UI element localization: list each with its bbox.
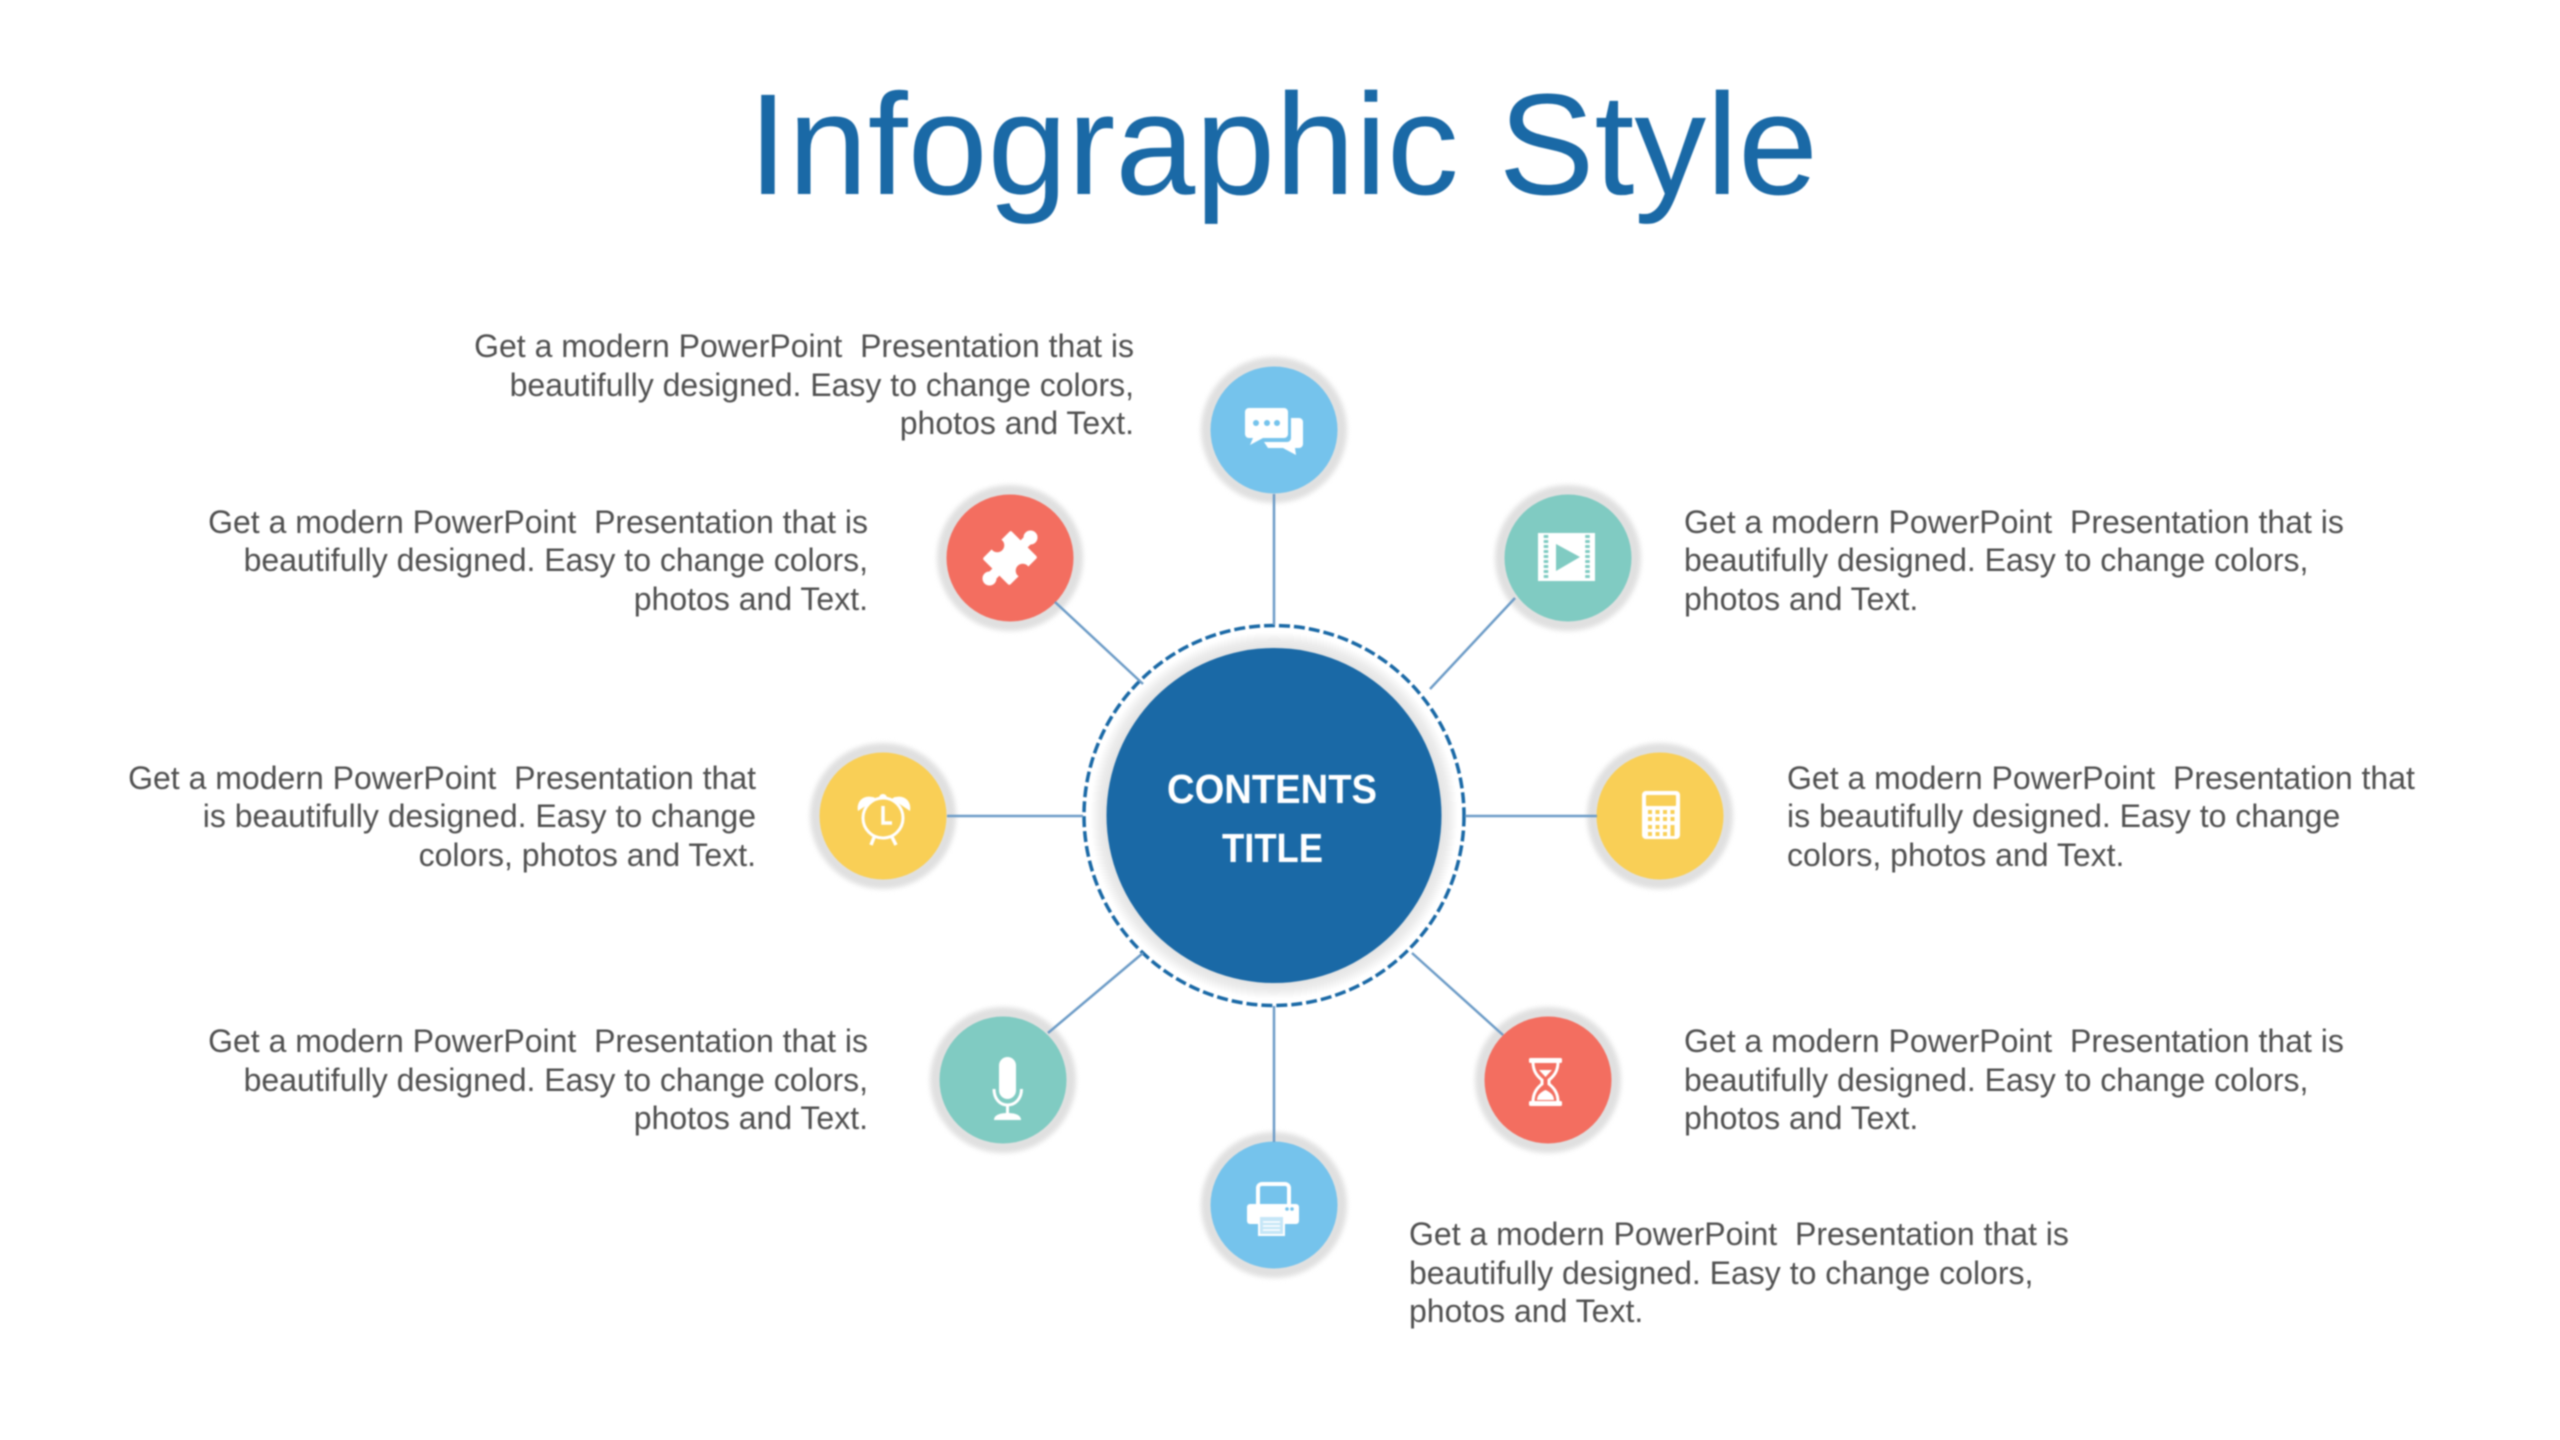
node: puzzle [937,485,1083,631]
node: hourglass [1475,1007,1621,1153]
text block: left [128,760,756,873]
text block: upper left: photos and Text. [634,581,868,617]
node: calculator [1587,743,1733,889]
hub halo [1090,632,1458,1000]
node: chat [1201,357,1347,503]
text block: right [1787,760,2415,873]
hub label [1167,766,1377,871]
text block: left: colors, photos and Text. [419,837,756,873]
text block: top: beautifully designed. Easy to change colors, [510,367,1134,403]
text block: lower left [208,1023,868,1136]
icon: puzzle piece [967,515,1053,601]
text block: lower left: photos and Text. [634,1100,868,1136]
text block: upper right: photos and Text. [1684,581,1918,617]
icon: microphone [994,1057,1022,1120]
icon: calculator [1642,791,1680,839]
node: video [1495,485,1641,631]
node: printer [1201,1132,1347,1278]
text block: upper right [1684,504,2344,617]
text block: lower right: Get a modern PowerPoint Presentation that is [1684,1023,2344,1059]
text block: upper left: Get a modern PowerPoint Presentation that is [208,504,868,540]
text block: right: Get a modern PowerPoint Presentation that [1787,760,2415,796]
text block: left: is beautifully designed. Easy to change [203,798,756,834]
text block: top: photos and Text. [900,405,1134,441]
central hub [1084,626,1464,1006]
node: microphone [930,1007,1076,1153]
icon: chat bubbles [1245,408,1303,455]
text block: right: colors, photos and Text. [1787,837,2124,873]
text block: bottom [1409,1216,2069,1329]
node: alarm clock [810,743,956,889]
text block: bottom: beautifully designed. Easy to change colors, [1409,1255,2033,1291]
hub disc [1106,648,1442,983]
text block: lower left: beautifully designed. Easy to change colors, [244,1062,868,1098]
icon: printer [1247,1184,1299,1235]
text block: bottom: photos and Text. [1409,1293,1643,1329]
text block: right: is beautifully designed. Easy to change [1787,798,2340,834]
text block: upper right: beautifully designed. Easy to change colors, [1684,542,2308,578]
text block: bottom: Get a modern PowerPoint Presentation that is [1409,1216,2069,1252]
text block: left: Get a modern PowerPoint Presentation that [128,760,756,796]
hub dashed ring [1084,626,1464,1006]
text block: top [474,328,1134,441]
text block: lower right: photos and Text. [1684,1100,1918,1136]
text block: upper left [208,504,868,617]
text block: upper right: Get a modern PowerPoint Presentation that is [1684,504,2344,540]
text block: lower right [1684,1023,2344,1136]
text block: lower left: Get a modern PowerPoint Presentation that is [208,1023,868,1059]
title: Infographic Style [748,64,1818,225]
icon: film play [1538,533,1595,581]
connector lines [947,494,1597,1142]
icon: alarm clock [858,794,910,845]
hub label: CONTENTS [1167,766,1377,812]
text block: lower right: beautifully designed. Easy to change colors, [1684,1062,2308,1098]
icon: hourglass [1529,1058,1562,1106]
hub label: TITLE [1222,825,1323,871]
text block: top: Get a modern PowerPoint Presentation that is [474,328,1134,364]
text block: upper left: beautifully designed. Easy to change colors, [244,542,868,578]
